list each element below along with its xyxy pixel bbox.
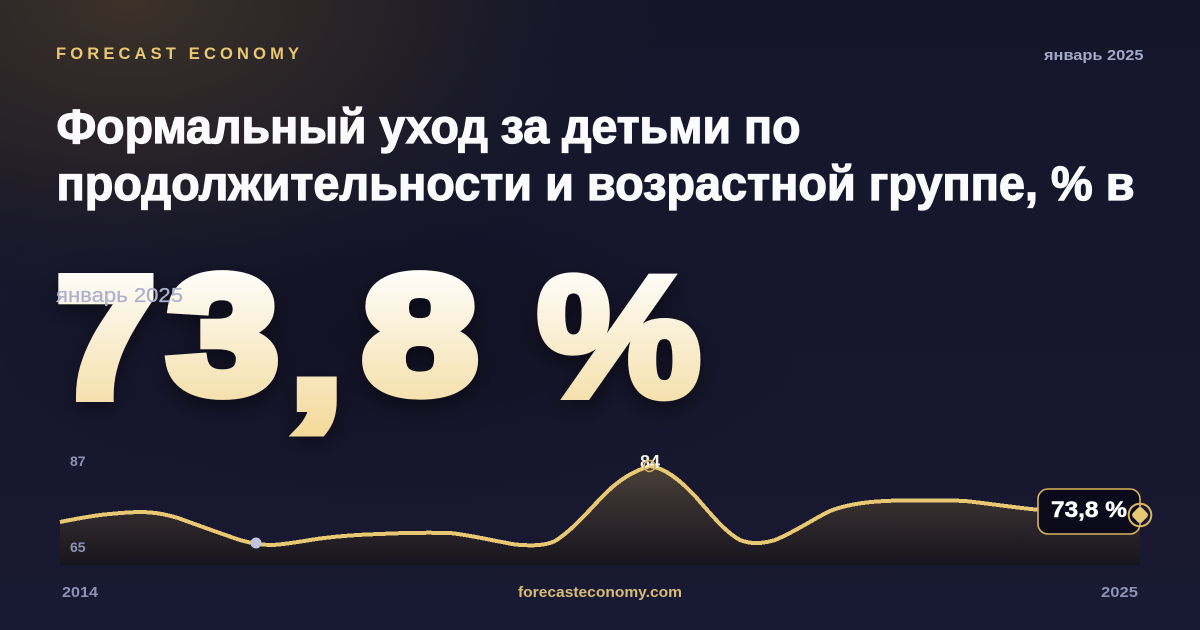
big value: , — [291, 264, 342, 440]
big value: % — [537, 241, 701, 433]
axis labels — [62, 453, 1138, 601]
brand label: FORECAST ECONOMY — [56, 45, 299, 63]
current point marker — [1129, 504, 1151, 526]
big value: 7 — [57, 243, 155, 433]
title line 1: Формальный уход за детьми по — [56, 100, 800, 154]
x end: 2025 — [1101, 584, 1138, 601]
peak value label: 84 — [640, 452, 660, 472]
trend line — [60, 466, 1140, 545]
site url: forecasteconomy.com — [518, 584, 682, 601]
title — [56, 100, 1134, 211]
big value: 8 — [363, 243, 477, 428]
title line 2: продолжительности и возрастной группе, % в — [56, 157, 1134, 211]
date top right: январь 2025 — [1044, 47, 1144, 64]
area under curve — [60, 466, 1140, 565]
date overlapping value: январь 2025 — [56, 285, 183, 307]
x start: 2014 — [62, 584, 99, 601]
line chart — [60, 452, 1151, 565]
current value badge: 73,8 % — [1051, 497, 1127, 522]
y max: 87 — [70, 453, 86, 469]
current value badge — [1038, 489, 1140, 534]
y min: 65 — [70, 539, 86, 555]
big value — [57, 241, 701, 440]
low point marker — [250, 538, 262, 548]
big value: 3 — [168, 243, 278, 428]
peak marker — [644, 460, 655, 472]
